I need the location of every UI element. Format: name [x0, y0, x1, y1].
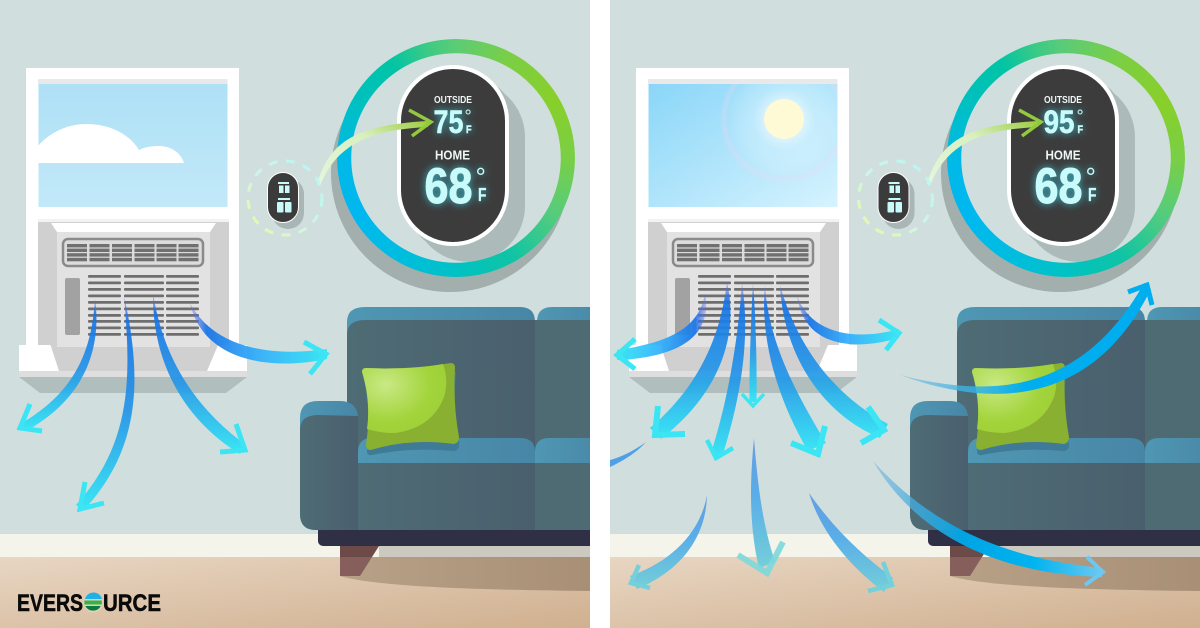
home label: HOME — [435, 148, 470, 162]
outside temperature: ° — [1076, 106, 1084, 126]
arrow: down slight left — [707, 283, 745, 458]
arrow: down left — [20, 298, 96, 431]
thermostat display — [1009, 67, 1117, 244]
arrow: down right large — [764, 285, 826, 454]
icon: cloud — [38, 124, 184, 163]
outside label: OUTSIDE — [434, 95, 472, 106]
logo: Eversource: O — [84, 590, 102, 617]
outside temperature: F — [466, 124, 472, 136]
sensor signal line with arrow — [927, 110, 1041, 186]
arrow: down left large — [650, 282, 730, 439]
window with cloudy sky — [26, 68, 239, 345]
gradient ring — [336, 39, 574, 277]
wireless sensor — [248, 161, 322, 235]
home label: HOME — [1046, 148, 1080, 162]
arrow: far left — [617, 293, 706, 369]
stream: left edge — [610, 442, 646, 467]
baseboard — [610, 534, 989, 557]
divider between panels — [590, 0, 610, 628]
logo: Eversource: URCE — [103, 590, 161, 617]
logo: Eversource: EVERS — [17, 590, 83, 617]
arrow: down — [76, 295, 134, 510]
home temperature: F — [478, 185, 486, 205]
arrow: sweeping down past couch — [873, 461, 1103, 585]
thermostat body shadow — [1028, 86, 1135, 262]
window with sun — [636, 59, 849, 345]
home temperature: F — [1088, 185, 1096, 205]
home temperature: ° — [1086, 162, 1096, 192]
sensor signal line with arrow — [317, 110, 431, 186]
icon: sun — [764, 99, 804, 139]
arrow: faded down right — [809, 493, 893, 592]
arrow: down right — [153, 293, 246, 454]
outside temperature: F — [1078, 124, 1083, 136]
baseboard — [0, 534, 379, 557]
window air conditioner — [648, 219, 839, 371]
thermostat ring shadow — [941, 120, 1174, 292]
arrow: faded down left — [630, 495, 707, 589]
wireless sensor — [858, 161, 932, 235]
couch — [300, 307, 610, 591]
arrow: sweeping up past couch — [900, 285, 1152, 394]
outside temperature: 95 — [1044, 104, 1074, 140]
outside temperature: 75 — [434, 104, 464, 140]
panel: 95 degree day, overworked airflow — [610, 0, 1200, 628]
floor — [610, 557, 1200, 628]
floor — [0, 557, 590, 628]
outside temperature: ° — [464, 106, 472, 126]
pillow — [362, 363, 459, 455]
outside label: OUTSIDE — [1044, 95, 1082, 106]
gradient ring — [946, 39, 1184, 277]
wall — [0, 0, 590, 534]
thermostat ring shadow — [331, 120, 564, 292]
thermostat display — [399, 67, 507, 244]
thermostat ring interior — [961, 54, 1171, 263]
thermostat body shadow — [418, 86, 525, 262]
airflow arrows — [20, 293, 327, 510]
pillow — [972, 363, 1069, 455]
arrow: right toward couch — [190, 303, 327, 374]
window sill — [19, 345, 247, 393]
home temperature: 68 — [1034, 158, 1082, 214]
home temperature: ° — [476, 162, 486, 192]
floor shadow — [340, 557, 590, 591]
arrow: right down large — [780, 285, 888, 443]
arrow: faded down — [738, 438, 783, 573]
panel: 75 degree day, comfortable airflow — [0, 0, 610, 628]
arrow: straight down short — [742, 283, 764, 406]
window sill — [629, 345, 857, 393]
airflow arrows from overworked unit — [617, 282, 899, 458]
home temperature: 68 — [424, 158, 472, 214]
wall — [610, 0, 1200, 534]
window air conditioner — [38, 219, 229, 371]
logo: Eversource — [17, 590, 161, 617]
couch — [910, 307, 1200, 591]
arrow: right — [797, 295, 899, 350]
faded airflow streams — [610, 285, 1152, 592]
floor shadow — [950, 557, 1200, 591]
thermostat ring interior — [351, 54, 561, 263]
